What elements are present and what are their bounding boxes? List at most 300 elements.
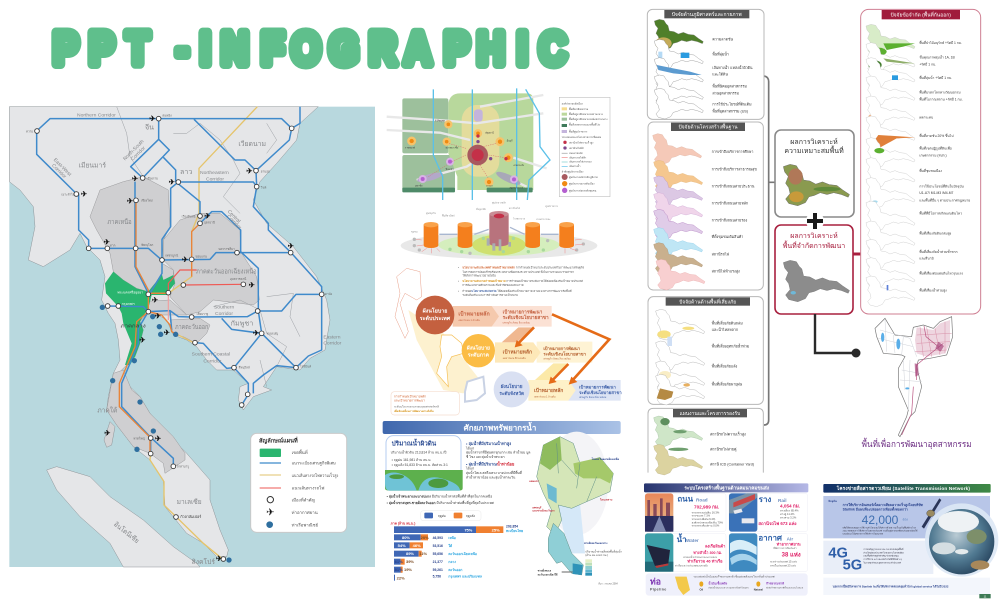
transport: air card [729,533,808,572]
map: city labels: นครราชสีมา [218,247,235,251]
policy: top bullet text [458,265,584,297]
transport: water card: ท่าเรือระหว่างประเทศและชายฝั่ง [675,564,708,568]
map: airports: ✈ [253,328,259,337]
map: country and corridor labels: เมียนมาร์ [79,161,106,169]
map: country and corridor labels: Northeastern [200,170,229,176]
policy: top bullet text: ในการลดการปล่อยก๊าซเรือนกระจกตามข้อตกลงระหว่างประเทศ ทั้งในภาพรวมและรายสาขา [462,269,574,274]
factors: risk box: พื้นที่เสี่ยงภัยแล้ง [712,363,738,368]
factors: physical geography box: ปัจจัยด้านภูมิศาสตร์และกายภาพ [672,11,742,18]
transport: air card: 38 แห่ง [782,552,801,559]
transport: road card: ทางหลวงพิเศษ 6.4% [692,517,716,521]
plan: legend: ศูนย์กลางรองระดับเมือง [569,182,595,186]
panel: site selection factors [647,9,776,475]
satellite: 4G 5G box: ในภาคธุรกิจและอุตสาหกรรม ทั่วประเทศ [863,560,902,565]
map: airports [81,114,294,563]
factors: infrastructure box: ปัจจัยด้านโครงสร้างพื้นฐาน [678,122,738,131]
transport: road card: ทางหลวงสัมปทาน 0.0% [692,524,720,528]
plan: centre labels: บางนา [486,185,494,188]
diagram: 3D polycentric cylinders: ศูนย์ธุรกิจ [426,211,437,216]
diagram: 3D polycentric cylinders [401,200,597,259]
policy: Thailand outline [395,268,422,338]
plan: centre labels: ปิ่นเกล้า [445,167,454,171]
satellite: 4G 5G box: 4G [828,545,848,561]
plan: legend: พื้นที่ศูนย์ราชการ [569,129,588,133]
factors: physical geography box: พื้นที่นิคมอุตสาหกรรม [712,84,747,90]
plan: centre labels [405,119,524,190]
map: city labels: คุนหมิง [162,114,172,119]
water: basin notes: ลุ่มน้ำสาขาที่มีฝนตกชุกมาก เช่น ลำน้ำยม มูล [466,450,530,456]
plan: legend: พื้นที่อยู่อาศัยหนาแน่นปานกลาง [569,112,604,116]
factors: risk box: พื้นที่เสี่ยงภัยดินถล่ม [712,320,743,325]
transport: rail card: ราง [759,495,771,504]
panel: constraint factors [861,9,981,314]
map: city labels: ทวาย [26,129,33,133]
water: basin map of Thailand: และชายฝั่งตะวันตก [532,508,555,513]
panel: constraint analysis box: ผลการวิเคราะห์ [790,232,838,240]
plan: legend: เส้นทางน้ำ [569,164,581,168]
map: country and corridor labels: สิงคโปร์ [192,558,215,566]
factors: risk box: ปัจจัยด้านด้านพื้นที่เสี่ยงภัย [679,296,736,305]
policy: provincial row: ระดับเชิงนโยบายสาขา [579,389,622,395]
water: stacked bar chart: ตะวันออกเฉียงเหนือ [448,551,477,556]
map: city labels: ตาก [110,244,116,248]
plan: centre labels: ลาดกระบัง [513,164,524,167]
map: country and corridor labels: Corridor [215,311,233,317]
constraints: labels: พื้นที่เสี่ยงภัยดินถล่มสูง [919,231,952,236]
transport: road card: 702,989 กม. [694,505,719,510]
policy: regional row: เป้าหมายการพัฒนา [543,345,581,351]
map: blue economic corridors [37,107,322,467]
water: runoff box [386,436,461,482]
water: basin notes: • ลุ่มน้ำที่มีปริมาณน้ำท่าสูง [466,439,511,447]
plan: legend: องค์ประกอบผังเมือง [562,102,583,106]
water: chart legend: ฤดูฝน [438,514,446,518]
plan: centres [408,121,517,185]
factors: risk box: และน้ำไหลหลาก [712,327,738,332]
map: airports: ✈ [132,174,138,183]
policy: regional row: ผังนโยบาย [467,344,490,351]
water: basin notes: ชี โขง และลุ่มน้ำเจ้าพระยา [466,454,505,460]
policy: orange flow arrows [515,314,609,385]
map: northern region [90,177,173,292]
plan: centre labels: มหาชัย [415,184,423,188]
plan: centre labels: มีนบุรี [506,139,513,144]
panel: constraint analysis box: พื้นที่จำกัดการพัฒนา [783,239,845,250]
legend: map symbols: แนวเส้นทางรถไฟ [292,486,325,491]
legend: map symbols: ท่าเรือพาณิชย์ [292,522,319,527]
constraints: labels: พื้นที่ลุ่มน้ำ +รัศมี 1 กม. [919,75,952,81]
map: city labels: เสียมราฐ [197,312,209,316]
transport: road card: ทางชนบท 7.1% [692,514,711,518]
policy: regional row: ระดับเชิงนโยบายสาขา [543,351,587,357]
constraints: labels: และพื้นที่อื่น ๆ ตามประกาศกฎหมาย [919,197,970,203]
diagram: 3D polycentric cylinders: ชุมชน [411,229,418,234]
transport: air card: ที่มีตารางการบินประจำ [773,546,797,550]
constraints: labels: U1-U7/ M1-M3 /M4-M7 [919,191,954,195]
water: basin notes: • ลุ่มน้ำเจ้าพระยาและบางปะกง มีปริมาณน้ำท่าต่อพื้นที่ต่ำที่สุดในภาคเหนือ [387,493,492,500]
water: stacked bar chart [391,520,523,581]
map: airports: ✈ [155,311,161,320]
constraints: labels: พื้นที่เสี่ยงน้ำท่วมสูง [919,287,947,292]
policy: national row: ระดับเชิงนโยบายสาขา [503,314,549,320]
plan: legend: พื้นที่พาณิชยกรรม [569,107,589,111]
water: stacked bar chart: 59,261 [433,568,443,572]
factors: infrastructure box: การเข้าถึงถนนสายรอง [712,217,747,222]
transport: pipeline strip [646,573,808,596]
satellite: 4G 5G box: 5G [843,557,862,573]
legend: map symbols [251,433,347,532]
water: runoff box: ปริมาณน้ำผิวดิน [392,437,437,447]
water: stacked bar chart: 19% [404,567,412,572]
water: runoff box: ปริมาณน้ำผิวดิน 213,814 ล้าน ลบ.ม./ปี [391,449,446,454]
water: stacked bar chart: ตะวันออก [448,567,462,572]
policy: provincial row: ระดับจังหวัด [499,390,524,396]
transport: water card: น้ำ [677,533,687,544]
constraints: labels: พื้นที่ชุมชนเมือง [919,168,942,174]
factors: infrastructure box: สถานีไฟฟ้าแรงสูง [712,268,740,273]
factors: physical geography box: ความลาดชัน [712,37,733,42]
water: stacked bar chart: 61% [395,559,403,564]
map: country and corridor labels: ภาคตะวันออก [175,323,208,331]
satellite: page number [979,594,991,598]
transport: water card: ทางลำน้ำ 300 กม. [693,549,722,555]
map: city labels: เชียงใหม่ [141,198,153,202]
plan: legend: ระบบขนส่งและโครงข่ายการเชื่อมต่อ [562,135,602,139]
water: basin map of Thailand: โขงตะวันออกเฉียงเหนือ [591,457,620,461]
factors: projects box: แผนงานและโครงการรองรับ [680,410,740,417]
transport: header: ระบบโครงสร้างพื้นฐานด้านคมนาคมขนส่ง [684,484,770,492]
map: city labels: หาดใหญ่ [133,436,145,440]
map: seaports [100,305,232,563]
map: airports: ✈ [127,196,133,205]
policy: provincial row [494,363,622,407]
constraints: labels: ผลกระทบ [919,116,933,120]
map: city labels: อุดรธานี [204,220,215,225]
map: city labels: ขอนแก่น [195,254,207,258]
map: airports: ✈ [149,114,155,123]
satellite: Starlink box: เพื่อให้ครอบคลุมการใช้งานทั่วโลกและให้บริการด้วยความเร็วสูงในพื้นที่ห่างไกล [843,524,916,530]
transport: water card: ตามแม่น้ำเจ้าพระยาและบางปะกง [683,555,717,559]
factors: infrastructure box: การเข้าถึงบริการสาธารณสุข [712,166,757,172]
policy: top bullet text: ระดับท้องถิ่น และการดำเนินการตามเป้าหมาย [462,293,518,297]
policy: note box: และเป้าหมายการพัฒนา [394,399,425,403]
map: country and corridor labels: Southern Coastal [192,352,230,358]
water: stacked bar chart: 21,377 [433,560,443,564]
map: country and corridor labels [50,113,342,566]
constraints: labels: +รัศมี 1 กม. [919,61,936,66]
map: country and corridor labels: กัมพูชา [231,320,254,328]
map: orange rail line [119,200,200,453]
map: airports: ✈ [249,281,255,290]
legend: map symbols: สัญลักษณ์แผนที่ [259,437,298,445]
satellite: Starlink box: การให้บริการอินเทอร์เน็ตดาวเทียมความเร็วสูงโดยบริษัท [843,501,924,508]
policy: national row [416,296,552,334]
map: red freight lines [168,270,243,293]
satellite: 4G 5G box: การใช้งาน IoT และเทคโนโลยีดิจิทัลต่าง ๆ [863,557,902,561]
icon: constraint map [783,260,850,302]
map: country and corridor labels: Southern [214,304,234,310]
map: country and corridor labels: Corridor [203,358,222,364]
map: city labels: กัวลาลัมเปอร์ [180,514,201,519]
map: airports: ✈ [139,336,145,345]
policy: note box: การกำหนดเป้าหมายหลัก [394,394,426,398]
map: country and corridor labels: ลาว [180,169,193,176]
panel: industrial development result map [862,317,972,450]
transport: pipeline strip: ท่อ [650,576,661,586]
water: stacked bar chart: ทะเบียนไทย [506,528,523,533]
transport: pipeline strip: ระบบท่อส่งน้ำมันและก๊าซธรรมชาติ เชื่อมต่อคลังและโรงกลั่นทั่วประเทศ [693,574,775,578]
panel: land transport infrastructure [644,483,808,596]
map: Phuket island [104,422,115,447]
map: southern region [107,370,185,473]
policy: national row: ระดับประเทศ [420,315,451,322]
transport: water card [645,533,726,572]
policy: top bullet text: นโยบาย ระดับประเทศกำหนดเป้าหมายหลัก การกำหนดเป้าหมายระดับประเทศในการพัฒนาเศรษฐกิจ [462,265,584,270]
diagram: 3D polycentric cylinders: สถานีรถไฟ [509,206,520,210]
map: country and corridor labels: Eastern [323,334,341,340]
transport: header [644,483,808,492]
transport: pipeline strip: ท่อส่งน้ำมันระยะทางรวมหลายร้อยกิโลเมตร [708,586,749,590]
map: airports: ✈ [246,166,252,175]
map: city labels: พนมเปญ [267,331,279,335]
plan: legend: ศูนย์กลางย่อยระดับชุมชน [569,188,597,193]
water: stacked bar chart: 203,854 [506,524,518,528]
plan: centre labels: ตลาดบางซื่อ [446,146,459,150]
water: stacked bar chart: 75% [464,527,473,532]
policy: note box: ระดับนโยบายตามกรอบยุทธศาสตร์ชาติ [394,404,439,409]
transport: rail card: ทางสาม 3.2% [780,515,797,519]
transport: pipeline strip: ท่อส่งก๊าซธรรมชาติทั้งบนบกและในทะเล [766,586,804,590]
panel: constraint analysis box [775,225,853,314]
factors: physical geography box: พื้นที่ลุ่มน้ำ [712,51,729,57]
transport: road card: องค์กรปกครองท้องถิ่น 70% [692,520,724,524]
map: country and corridor labels: มาเลเซีย [177,498,202,506]
constraints: labels: พื้นที่ลาดชัน 20% ขึ้นไป [919,133,953,138]
constraints: labels: การใช้ประโยชน์ที่ดินในปัจจุบัน [919,183,965,189]
policy: top bullet text: การพัฒนาตามศักยภาพและข้อจำกัดของแต่ละภาค [462,283,524,287]
policy: regional row: เศรษฐกิจ สังคม สิ่งแวดล้อม [543,357,571,361]
water: stacked bar chart: 46% [413,543,421,548]
map: city labels: กรุงเทพฯ [122,302,135,307]
transport: rail card: 4,054 กม. [780,503,800,508]
water: basin map of Thailand: แคมแรก [529,479,539,483]
plan: centre labels: ราชพฤกษ์ [405,146,415,150]
satellite: Starlink box: ดวง [903,518,908,522]
map: airports: ✈ [182,255,188,264]
map: mainland land mass [9,107,330,557]
diagram: 3D polycentric cylinders: ที่อยู่อาศัย [476,207,487,211]
map: airports: ✈ [104,237,110,246]
map: city labels: เชียงราย [147,176,158,180]
transport: road card: ถนน [677,494,694,503]
water: runoff box: • ฤดูแล้ง 51,833 ล้าน ลบ.ม. สัดส่วน 3:1 [392,463,448,467]
panel: satellite transmission network [823,484,998,598]
water: stacked bar chart: 22% [397,575,405,580]
map: airports: ✈ [81,190,87,199]
map: city labels: โฮจิมินห์ [300,364,311,368]
transport: rail card: ทางคู่ 11.4% [780,512,795,516]
factors: physical geography box: สวนอุตสาหกรรม [712,90,740,96]
policy: top bullet text: กำหนดนโยบายระดับจังหวัด ให้สอดคล้องกับเป้าหมายภาค ตามแนวทางการพัฒนาเชิงพื้นที่ [462,288,572,293]
panel: suitability analysis box: ผลการวิเคราะห์ [790,138,838,146]
constraints: labels: พื้นที่ป่าไม้อนุรักษ์ +รัศมี 1 กม. [919,40,962,46]
map: country and corridor labels: North-South [122,139,146,162]
water: stacked bar chart: 39% [406,559,414,564]
panel: water resources [383,421,622,585]
policy: regional row: เป้าหมายหลัก [503,348,532,355]
plan: legend: เส้นทางรถไฟสายรอง [569,160,592,164]
diagram: 3D polycentric cylinders: โรงพยาบาล [513,216,526,220]
policy: provincial row: เป้าหมายการพัฒนา [579,383,616,389]
factors: projects box: สถานีรถไฟสายคู่ [710,446,737,451]
factors: physical geography box: เส้นทางน้ำ แหล่งน้ำผิวดิน [712,65,753,70]
map: country and corridor labels: จีน [145,123,154,131]
transport: water card: ท่าเรือรวม 46 ท่าเรือ [687,559,723,564]
plan: centre labels: ปทุมธานี [485,130,494,135]
constraints: labels: เกษตรกรรม (สปก.) [919,153,947,157]
water: basin map of Thailand: โตนเลสาบ [599,498,613,502]
map: country and corridor labels: ภาคตะวันออกเฉียงเหนือ [196,268,257,276]
arrow: red connector [853,252,861,256]
water: header: ศักยภาพทรัพยากรน้ำ [464,422,536,433]
map: airports: ✈ [155,434,161,443]
plan: water channels [433,88,550,200]
arrow: result connector [815,314,860,358]
water: basin notes: • ลุ่มน้ำที่มีปริมาณน้ำท่าน้อย [466,459,515,467]
satellite: Starlink box: Starlink มีแผนที่จะปล่อยดาวเทียมทั้งหมดกว่า [843,506,908,512]
policy: regional row [462,327,592,367]
map: airports: ✈ [216,554,222,563]
constraints: header [882,9,960,19]
map: country and corridor labels: Northern Corridor [77,113,116,119]
satellite: Starlink box [823,496,990,538]
transport: pipeline strip: น้ำมันเชื้อเพลิง [708,580,728,586]
map: city labels: พระนครศรีอยุธยา [117,289,143,295]
satellite: 4G 5G box: ส่วนใหญ่ของประเทศ โดยเฉพาะในเขตเมือง [863,550,904,554]
map: country and corridor labels: ภาคเหนือ [107,218,132,226]
panel: suitability analysis box [775,130,854,217]
policy: note box: เพื่อขับเคลื่อนการพัฒนาอย่างยั่งยืน [394,408,434,413]
transport: air card: ระหว่างประเทศ 15 แห่ง [770,559,798,563]
transport: air card: ภายในประเทศ 23 แห่ง [770,563,797,567]
map: country and corridor labels: Corridor [206,176,224,182]
constraints: labels: และสึนามิ [919,257,934,261]
plan: centre labels: รังสิตคูคต [435,119,445,123]
map: airports: ✈ [164,328,170,337]
legend: map symbols: เขตพื้นที่ [292,449,308,455]
policy: yellow projection beams [408,310,480,393]
map: airports: ✈ [152,296,158,305]
water: stacked bar chart: กลาง [448,560,456,564]
map: city labels: วินห์ [260,185,266,189]
factors: risk box [648,296,763,405]
result: caption: พื้นที่เพื่อการพัฒนาอุตสาหกรรม [862,437,972,450]
diagram: 3D polycentric cylinders: สวนสาธารณะ [536,217,551,221]
constraints: labels: พื้นที่เขตปฏิรูปที่ดินเพื่อ [919,146,952,151]
factors: infrastructure box: การเข้าถึงบริการการศึกษา [712,149,753,154]
policy: national row: ผังนโยบาย [423,307,447,315]
plan: legend: เส้นทางรถไฟฟ้า [569,155,587,159]
water: basin map of Thailand: ที่มา : กรมชล 2564 [598,581,618,585]
factors: infrastructure box [648,122,763,290]
constraints: labels: พื้นที่ที่มีโอกาสเกิดแผ่นดินไหว [919,211,962,216]
constraints: labels: ชั้นคุณภาพลุ่มน้ำ 1A, 1B [919,55,956,61]
water: stacked bar chart: 5,756 [433,574,441,578]
plan: legend: สถานีรถไฟฟ้า [569,146,585,150]
factors: projects box: สถานีรถไฟความเร็วสูง [710,431,746,437]
plan: legend: ถนนสายหลัก [569,151,583,155]
plan: legend [559,97,610,197]
water: stacked bar chart: 89% [406,551,414,556]
title: PPT -INFOGRAPHIC [53,23,567,74]
water: stacked bar chart: 55,656 [433,552,443,556]
satellite: page number: 11 [984,594,987,598]
constraints: labels [919,40,970,292]
water: basin notes [387,439,530,506]
water: stacked bar chart: ภาค (ล้าน ลบ.ม.) [391,520,415,525]
factors: physical geography box [647,9,764,119]
water: basin map of Thailand: (ล้าน ลบ.ม./ตร.กม.) [585,553,608,557]
satellite: header: โครงข่ายสื่อสารดาวเทียม (Satellite Transmission Network) [836,485,970,491]
policy: note box [391,392,459,415]
water: basin map of Thailand: ชายฝั่งตะวันออกล่าง [584,540,608,545]
water: chart legend [421,511,481,521]
transport: rail card: Rail [778,498,787,503]
policy: national row: เป้าหมายหลัก [458,309,490,317]
map: city nodes [35,116,324,561]
policy: top bullet text: • [458,266,459,270]
satellite: Starlink box: ปัจจุบัน [828,498,837,504]
policy: top bullet text: ให้เกิดการพัฒนาอย่างยั่งยืน [462,274,496,278]
water: basin map of Thailand: ตะวันออกเฉียงใต้ [538,571,558,576]
factors: physical geography box: และใต้ดิน [712,71,728,76]
factors: projects box [648,408,763,475]
water: basin notes: • ลุ่มน้ำเขาสมุทร-ชายฝั่งตะวันออก มีปริมาณน้ำท่าต่อพื้นที่สูงที่สุดในประเทศ [387,499,495,506]
map: airports: ✈ [104,428,110,437]
icon: plus sign [806,212,824,230]
legend: map symbols: แนวเส้นทางรถไฟความเร็วสูง [292,471,338,479]
map: country and corridor labels: Corridor [323,341,342,347]
policy: top bullet text: • [458,279,459,283]
map: country and corridor labels: East-West [52,157,73,178]
satellite: 4G 5G box [823,541,933,574]
factors: projects box: สถานี ICD (Container Yard) [710,461,754,466]
water: basin map of Thailand: เพชรบุรี [532,505,542,510]
transport: pipeline strip: ก๊าซธรรมชาติ [766,581,784,586]
transport: rail card: ทางเดี่ยว 85.4% [780,509,799,513]
satellite: Starlink box: 42,000 [862,513,899,527]
map: city labels: เมาะลำไย [61,192,75,196]
plan: legend: ศูนย์กลางหลักระดับภูมิภาค [569,175,598,179]
legend: map symbols: ✈ [266,508,275,519]
transport: air card: อากาศ [758,534,783,543]
transport: air card: ท่าอากาศยาน [777,542,801,547]
water: stacked bar chart: กรุงเทพฯ และปริมณฑล [448,573,482,579]
map: country and corridor labels: เวียดนาม [238,140,266,148]
water: basin notes: ลำน้ำสาขาน้อย และลุ่มน้ำสาละวิน [466,474,516,480]
map: city labels: พิษณุโลก [141,243,153,248]
panel: regional transport map [9,107,375,567]
constraints: small maps [866,24,915,307]
panel: spatial policy diagram [391,265,622,415]
map: country and corridor labels: อินโดนีเซีย [112,520,141,545]
map: airports: ✈ [204,212,210,221]
map: city labels: อุบลราชธานี [230,277,246,282]
map: country and corridor labels: ภาคใต้ [97,407,117,415]
policy: national row: เป้าหมายการพัฒนา [503,308,543,314]
map: city labels: เวียงจันทน์ [182,214,195,218]
satellite: header [823,484,991,493]
